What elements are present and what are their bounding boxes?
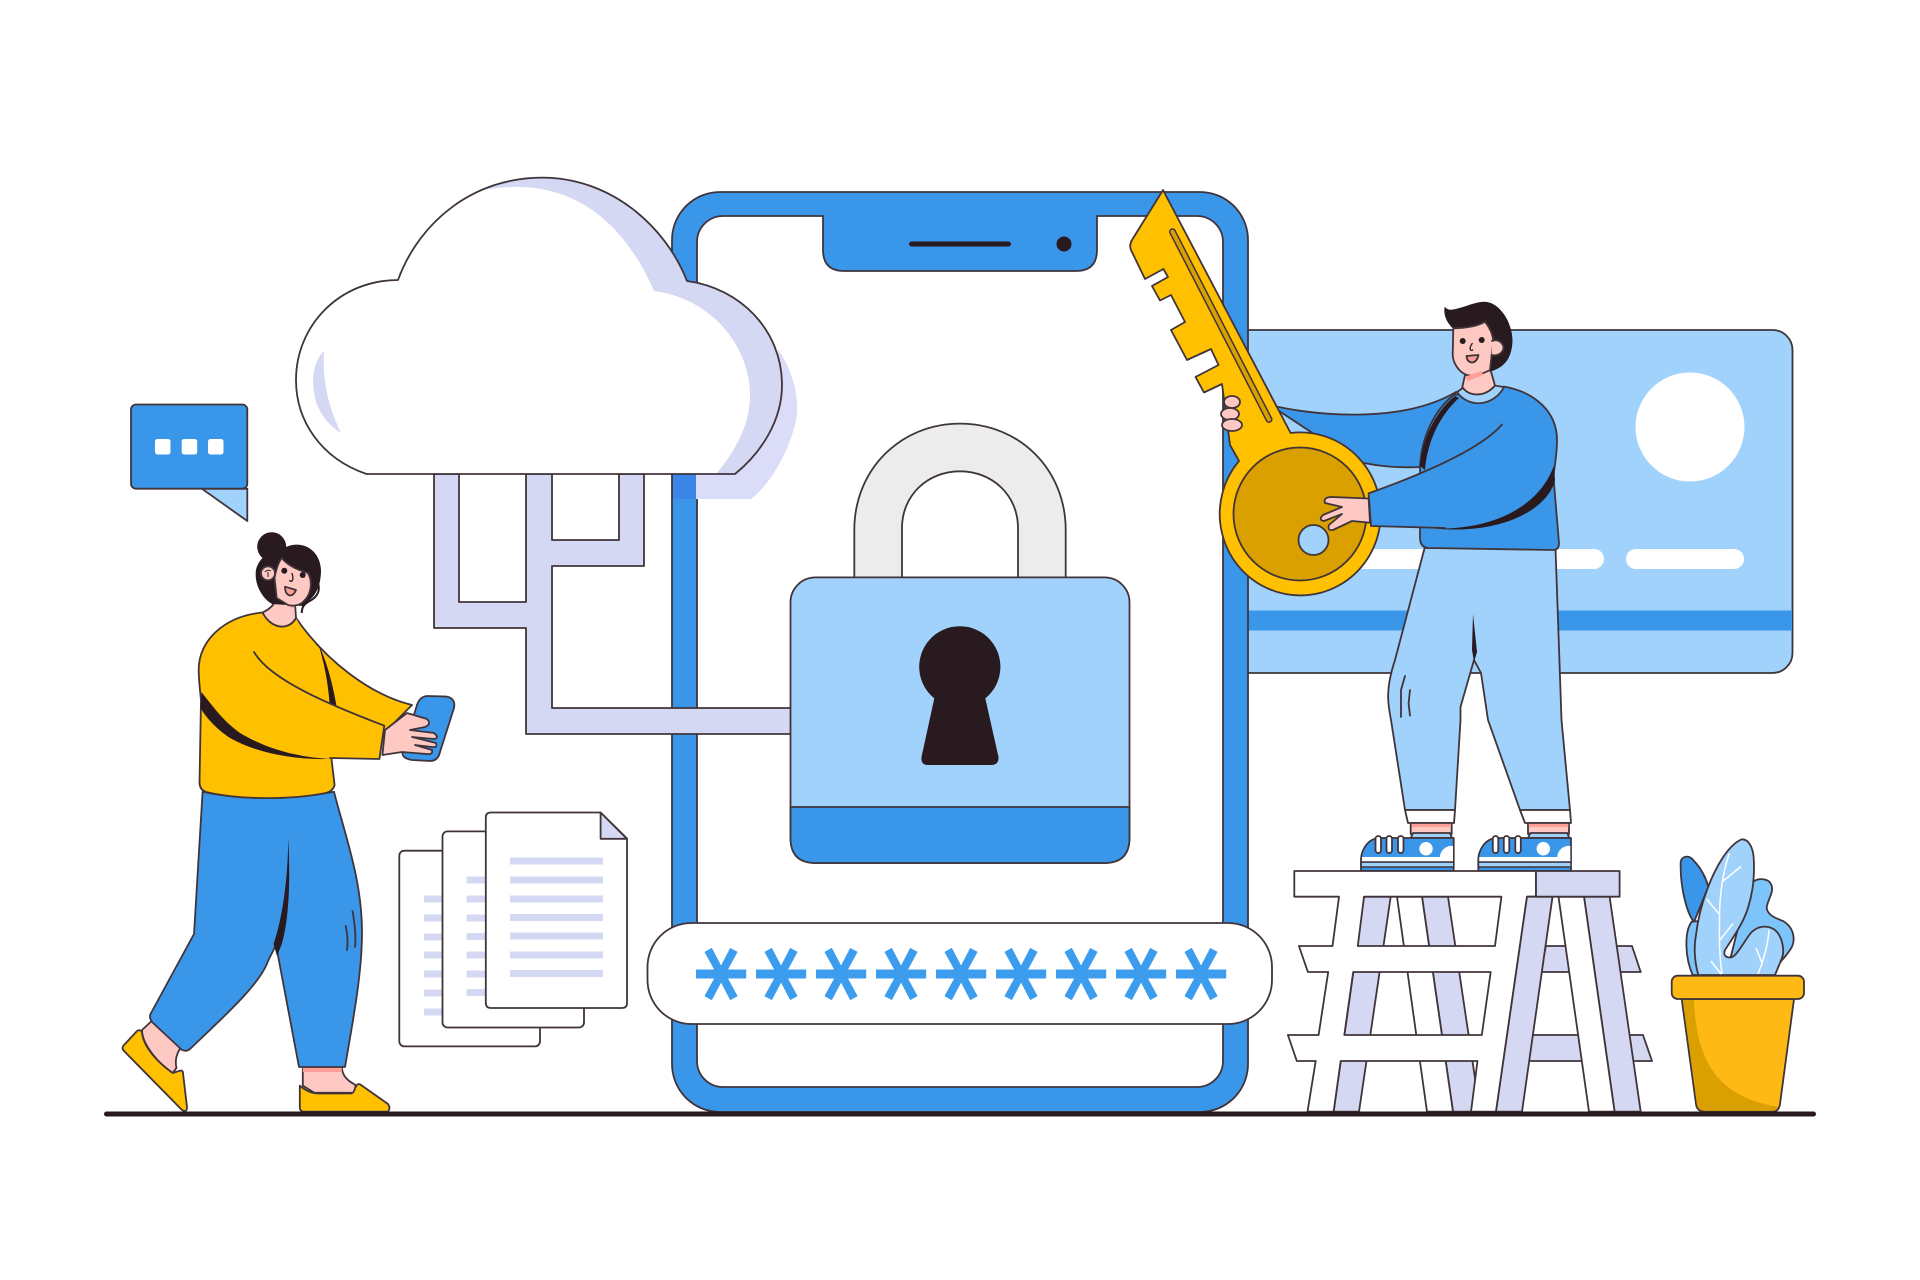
woman back sleeve (296, 618, 412, 730)
small side leaf (1686, 921, 1700, 975)
woman back sleeve edge (296, 618, 412, 730)
ladder rear white leg (1397, 897, 1453, 1112)
man sash strap (1435, 466, 1555, 530)
handheld device (402, 696, 454, 761)
golden key (1130, 190, 1381, 595)
password asterisks (640, 946, 1245, 1002)
phone camera (1056, 236, 1072, 252)
woman front shoe (300, 1084, 390, 1112)
key bow centre (1234, 448, 1366, 580)
knee lines (346, 911, 355, 950)
keyhole (919, 626, 1000, 765)
man left cuff (1405, 810, 1455, 823)
network pipes (434, 474, 791, 734)
man hair (1445, 302, 1512, 371)
man back arm (1270, 392, 1456, 467)
man trousers (1388, 548, 1570, 810)
man sweater (1420, 387, 1559, 550)
man left shoe (1361, 823, 1454, 871)
woman sweater body (199, 612, 340, 798)
password asterisks: * (700, 946, 825, 1002)
leaf veins (1707, 853, 1769, 974)
lock body (790, 577, 1130, 863)
woman face (261, 558, 311, 606)
woman neck blush (279, 598, 295, 608)
potted plant (1672, 839, 1804, 1112)
man front arm (1369, 424, 1502, 528)
woman rear foot (142, 1021, 180, 1073)
password asterisks: * (880, 946, 1005, 1002)
pot shadow (1683, 1000, 1778, 1111)
woman hand (382, 713, 437, 755)
man collar (1457, 386, 1504, 403)
man back strap (1420, 396, 1459, 470)
pot rim (1672, 976, 1804, 999)
speech bubble (131, 404, 247, 521)
password asterisks: * (820, 946, 945, 1002)
padlock (790, 424, 1130, 863)
middle document (442, 831, 584, 1028)
credit card (1230, 330, 1792, 673)
password field (640, 923, 1272, 1024)
password asterisks: * (940, 946, 1065, 1002)
key hole (1298, 525, 1328, 555)
woman front sleeve (240, 652, 384, 759)
lock base band (790, 807, 1130, 863)
ladder side white leg (1558, 897, 1615, 1112)
lock shackle (854, 424, 1066, 578)
ladder front frame (1288, 871, 1536, 1112)
phone speaker (909, 242, 1011, 246)
documents stack (399, 812, 627, 1046)
back document (399, 851, 540, 1046)
ladder top board end (1536, 871, 1620, 897)
man holding key (1130, 190, 1571, 871)
pot body (1682, 999, 1794, 1112)
woman in yellow sweater (122, 532, 454, 1112)
key slot (1172, 232, 1269, 419)
stepladder (1288, 871, 1652, 1112)
woman rear shoe (122, 1030, 187, 1111)
password asterisks: * (1120, 946, 1245, 1002)
big leaf (1695, 839, 1783, 975)
man back hand (1221, 396, 1242, 431)
cloud shadow (673, 349, 797, 499)
woman bag strap lower (200, 692, 330, 759)
smartphone (672, 192, 1248, 1112)
man neck (1462, 368, 1495, 397)
phone notch (823, 214, 1097, 271)
man right shoe (1478, 823, 1571, 871)
dark leaf (1681, 857, 1708, 922)
medium leaf (1730, 879, 1794, 965)
password asterisks: * (640, 946, 765, 1002)
password asterisks: * (760, 946, 885, 1002)
trouser crease (274, 838, 289, 956)
password asterisks: * (1000, 946, 1125, 1002)
man front hand (1321, 497, 1370, 530)
password asterisks: * (1060, 946, 1185, 1002)
woman front foot (303, 1067, 356, 1093)
woman trousers (150, 792, 362, 1067)
woman hair back (256, 532, 321, 613)
woman neck (263, 598, 296, 627)
man face (1453, 322, 1503, 381)
cloud (296, 178, 782, 474)
ground line (104, 1112, 1816, 1116)
woman bag strap upper (318, 643, 336, 706)
ladder back rungs (1525, 946, 1652, 1061)
ladder rear legs (1334, 897, 1480, 1112)
ladder side legs (1496, 897, 1641, 1112)
front document (486, 812, 627, 1008)
man right cuff (1520, 810, 1571, 823)
